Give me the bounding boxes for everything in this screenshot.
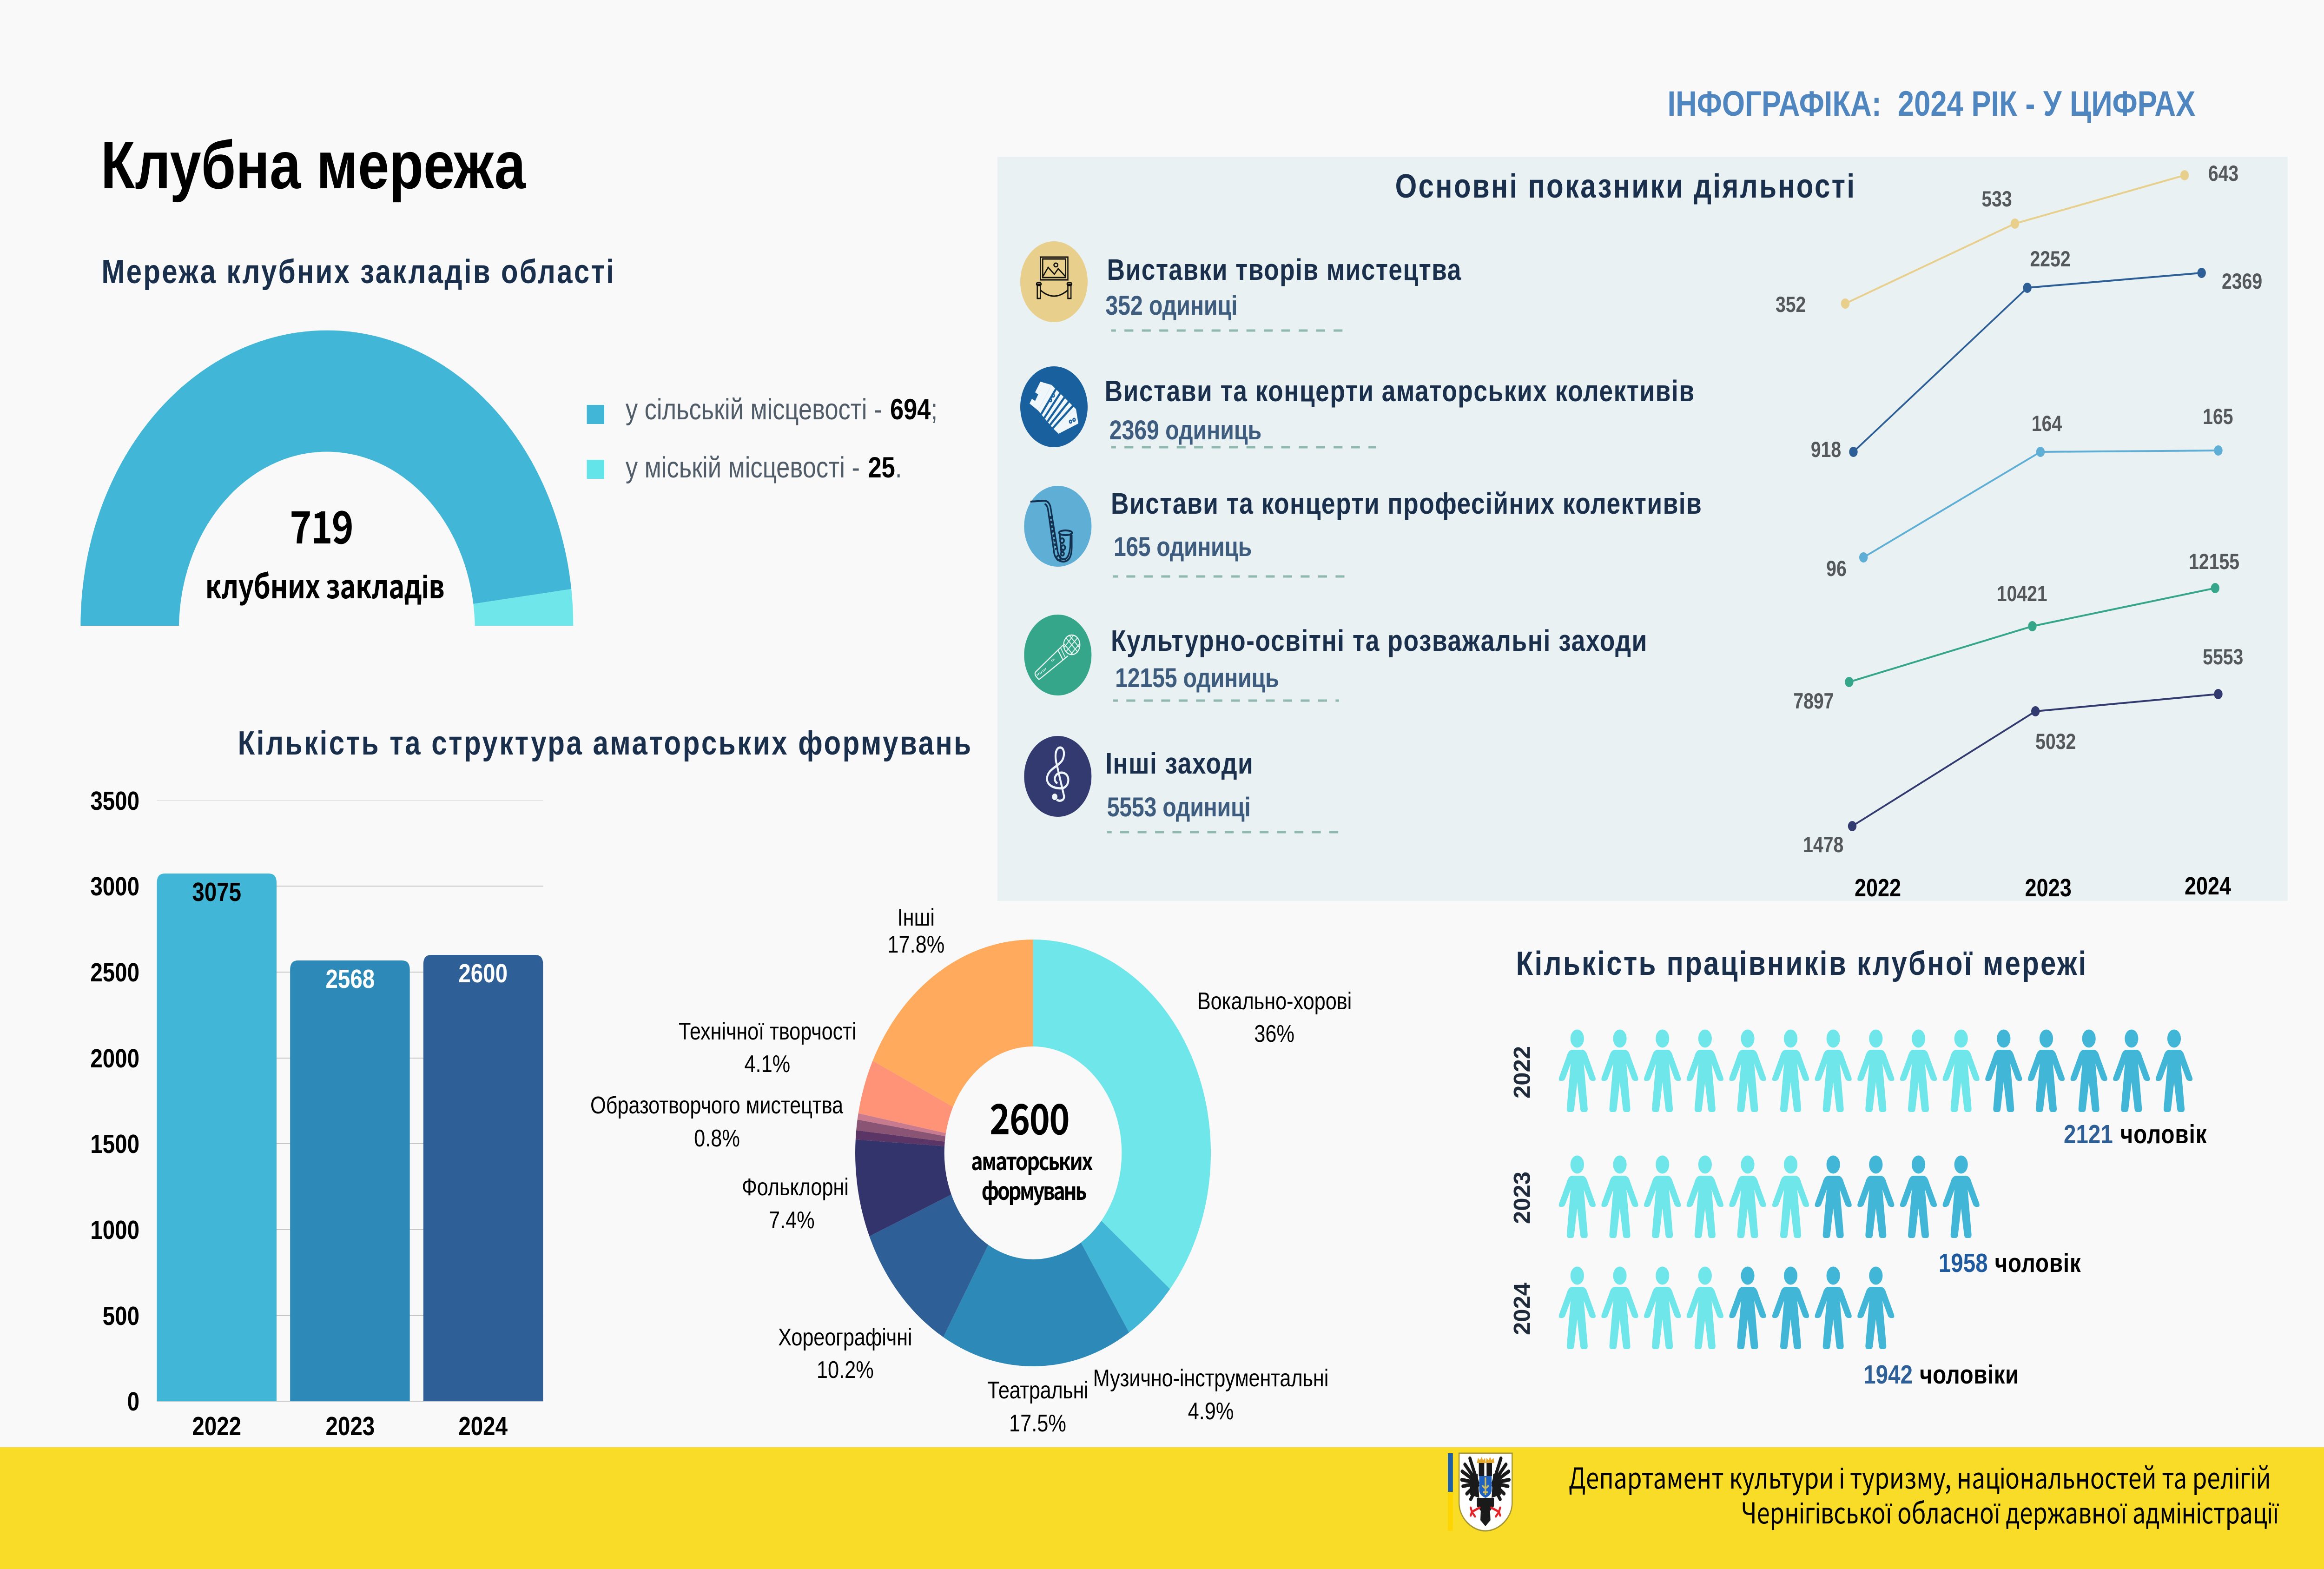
series: other events xyxy=(1803,645,2243,857)
donut labels: 10.2% xyxy=(817,1357,874,1384)
donut chart: structure of amateur groups xyxy=(590,904,1352,1437)
row value: 165 одиниць xyxy=(1114,532,1252,562)
bar value 2024: 2600 xyxy=(458,959,508,988)
heading: staff count: Кількість працівників клубної мережі xyxy=(1516,945,2086,982)
panel: main activity indicators xyxy=(997,157,2288,902)
gauge segment: urban xyxy=(473,589,573,626)
gauge chart: club institutions xyxy=(80,331,573,626)
y axis labels: 1000 xyxy=(90,1216,139,1245)
row: amateur performances xyxy=(1020,366,1694,447)
series: professional performances: 165 xyxy=(2203,405,2233,429)
count 2024 xyxy=(1863,1360,2019,1390)
donut labels: Образотворчого мистецтва xyxy=(590,1092,844,1119)
donut center caption xyxy=(971,1142,1093,1207)
y axis labels xyxy=(90,787,139,1417)
header: infographic year tag: ІНФОГРАФІКА: 2024 РІК - У ЦИФРАХ xyxy=(1668,84,2196,123)
bar 2022 xyxy=(157,874,277,1401)
x axis labels xyxy=(192,1412,508,1441)
bar chart: amateur groups by year xyxy=(90,787,543,1441)
row title: Вистави та концерти професійних колективів xyxy=(1111,488,1702,520)
year label 2023: 2023 xyxy=(1509,1172,1535,1224)
slice: small group xyxy=(856,1130,945,1146)
person row 2022 xyxy=(1559,1029,2192,1112)
gauge segment: rural xyxy=(80,331,571,626)
series: exhibitions: 533 xyxy=(1981,187,2012,212)
y axis labels: 500 xyxy=(103,1302,139,1331)
series: professional performances: 164 xyxy=(2032,412,2062,436)
year axis xyxy=(1855,872,2231,902)
person row 2024 xyxy=(1559,1266,1894,1349)
slice: technical 4.1% xyxy=(858,1061,953,1133)
count 2024: чоловіки xyxy=(1920,1360,2019,1390)
y axis labels: 0 xyxy=(127,1387,139,1417)
donut labels: 0.8% xyxy=(694,1125,740,1152)
donut center caption: аматорських xyxy=(971,1142,1093,1177)
y axis labels: 2500 xyxy=(90,958,139,987)
y axis labels: 3000 xyxy=(90,872,139,901)
icon: microphone xyxy=(1024,615,1091,695)
count 2023: 1958 xyxy=(1939,1249,1988,1278)
legend value: urban: 25 xyxy=(868,452,895,484)
row: exhibitions xyxy=(1020,241,1461,331)
series: professional performances xyxy=(1826,405,2233,581)
series: other events: 5032 xyxy=(2035,730,2076,754)
icon: framed picture xyxy=(1020,241,1088,322)
series: other events: 1478 xyxy=(1803,833,1843,857)
slice: choreography 10.2% xyxy=(869,1195,988,1337)
footer text: Чернігівської обласної державної адміністрації xyxy=(1741,1490,2279,1532)
bar 2023 xyxy=(290,960,410,1401)
year axis: 2024 xyxy=(2185,872,2231,900)
line chart: indicators by year xyxy=(1776,162,2262,902)
series: exhibitions: 352 xyxy=(1776,293,1806,317)
row: other events xyxy=(1024,736,1347,832)
donut labels: 4.1% xyxy=(744,1051,790,1078)
year label 2024: 2024 xyxy=(1509,1283,1535,1335)
series: exhibitions: 643 xyxy=(2208,162,2238,186)
heading: club network: Мережа клубних закладів області xyxy=(101,253,614,291)
count 2022: 2121 xyxy=(2064,1120,2113,1149)
legend text: urban: у міській місцевості - xyxy=(626,452,860,484)
year axis: 2023 xyxy=(2025,874,2072,902)
x axis labels: 2023 xyxy=(326,1412,375,1441)
donut labels: Вокально-хорові xyxy=(1197,988,1352,1015)
row value: 2369 одиниць xyxy=(1109,416,1261,445)
row: professional performances xyxy=(1024,486,1702,576)
slice: theatre 17.5% xyxy=(943,1243,1129,1366)
row title: Культурно-освітні та розважальні заходи xyxy=(1111,625,1647,657)
donut labels xyxy=(590,904,1352,1437)
legend swatch: rural xyxy=(587,405,604,424)
series: cultural events: 12155 xyxy=(2189,550,2239,574)
bar value 2022: 3075 xyxy=(192,878,241,907)
row title: Інші заходи xyxy=(1105,748,1253,780)
legend value: rural: 694 xyxy=(890,394,931,426)
person row 2023 xyxy=(1559,1156,1980,1238)
series: cultural events: 7897 xyxy=(1793,689,1834,714)
y axis labels: 2000 xyxy=(90,1044,139,1073)
row value: 352 одиниці xyxy=(1105,291,1238,321)
icon: accordion xyxy=(1020,366,1088,447)
slice: fine art 0.8% xyxy=(856,1119,945,1142)
icon: coat of arms xyxy=(1459,1453,1512,1531)
donut labels: Хореографічні xyxy=(778,1324,912,1351)
count 2022: чоловік xyxy=(2120,1120,2207,1149)
slice: small group xyxy=(858,1113,946,1136)
x axis labels: 2024 xyxy=(458,1412,508,1441)
year axis: 2022 xyxy=(1855,874,1901,902)
row value: 12155 одиниць xyxy=(1115,663,1279,693)
legend punctuation: ; xyxy=(931,394,938,426)
pictogram: staff by year xyxy=(1509,1029,2207,1390)
main title: Клубна мережа xyxy=(101,128,526,203)
slice: vocal-choral 36% xyxy=(1033,940,1211,1289)
series: amateur performances xyxy=(1811,247,2262,462)
series: cultural events xyxy=(1793,550,2239,714)
count 2024: 1942 xyxy=(1863,1360,1913,1390)
donut center caption: формувань xyxy=(982,1172,1087,1207)
slice: folk 7.4% xyxy=(855,1139,951,1236)
x axis labels: 2022 xyxy=(192,1412,241,1441)
count 2023 xyxy=(1939,1249,2081,1278)
series: cultural events: 10421 xyxy=(1997,582,2047,606)
heading: amateur groups: Кількість та структура аматорських формувань xyxy=(238,725,971,762)
y axis labels: 1500 xyxy=(90,1130,139,1159)
y axis labels: 3500 xyxy=(90,787,139,816)
footer band xyxy=(0,1447,2324,1569)
gauge caption: клубних закладів xyxy=(205,561,445,608)
donut labels: Технічної творчості xyxy=(679,1018,856,1045)
donut labels: 4.9% xyxy=(1188,1398,1234,1425)
count 2022 xyxy=(2064,1120,2207,1149)
footer text: Департамент культури і туризму, національностей та релігій xyxy=(1569,1456,2271,1497)
series: exhibitions xyxy=(1776,162,2238,317)
bar value 2023: 2568 xyxy=(326,965,375,994)
slice: other 17.8% xyxy=(873,940,1033,1107)
donut labels: 17.5% xyxy=(1009,1410,1066,1437)
row title: Виставки творів мистецтва xyxy=(1107,254,1461,286)
donut labels: Інші xyxy=(898,904,935,931)
row: cultural-educational events xyxy=(1024,615,1647,701)
legend swatch: urban xyxy=(587,460,604,479)
count 2023: чоловік xyxy=(1995,1249,2081,1278)
donut labels: Фольклорні xyxy=(742,1174,849,1201)
row title: Вистави та концерти аматорських колективів xyxy=(1105,375,1694,408)
donut center value: 2600 xyxy=(990,1086,1070,1146)
donut labels: Музично-інструментальні xyxy=(1093,1365,1328,1392)
series: other events: 5553 xyxy=(2203,645,2243,669)
donut labels: Театральні xyxy=(987,1377,1089,1404)
gauge legend xyxy=(587,394,938,484)
series: amateur performances: 2252 xyxy=(2030,247,2071,271)
legend punctuation: . xyxy=(895,452,902,484)
donut labels: 7.4% xyxy=(769,1207,815,1234)
icon: saxophone xyxy=(1024,486,1091,567)
bar 2024 xyxy=(423,955,543,1401)
row value: 5553 одиниці xyxy=(1107,793,1251,822)
donut labels: 17.8% xyxy=(887,931,944,958)
donut labels: 36% xyxy=(1254,1020,1294,1047)
slice: instrumental 4.9% xyxy=(1081,1221,1170,1332)
legend text: rural: у сільській місцевості - xyxy=(626,394,882,426)
flag of Ukraine strip xyxy=(1448,1453,1453,1531)
panel heading: Основні показники діяльності xyxy=(1395,168,1855,205)
series: amateur performances: 2369 xyxy=(2222,270,2262,294)
gauge total value: 719 xyxy=(290,492,354,556)
series: amateur performances: 918 xyxy=(1811,438,1841,462)
year label 2022: 2022 xyxy=(1509,1046,1535,1099)
series: professional performances: 96 xyxy=(1826,557,1847,581)
icon: treble clef xyxy=(1024,736,1091,817)
footer text xyxy=(1569,1456,2279,1532)
